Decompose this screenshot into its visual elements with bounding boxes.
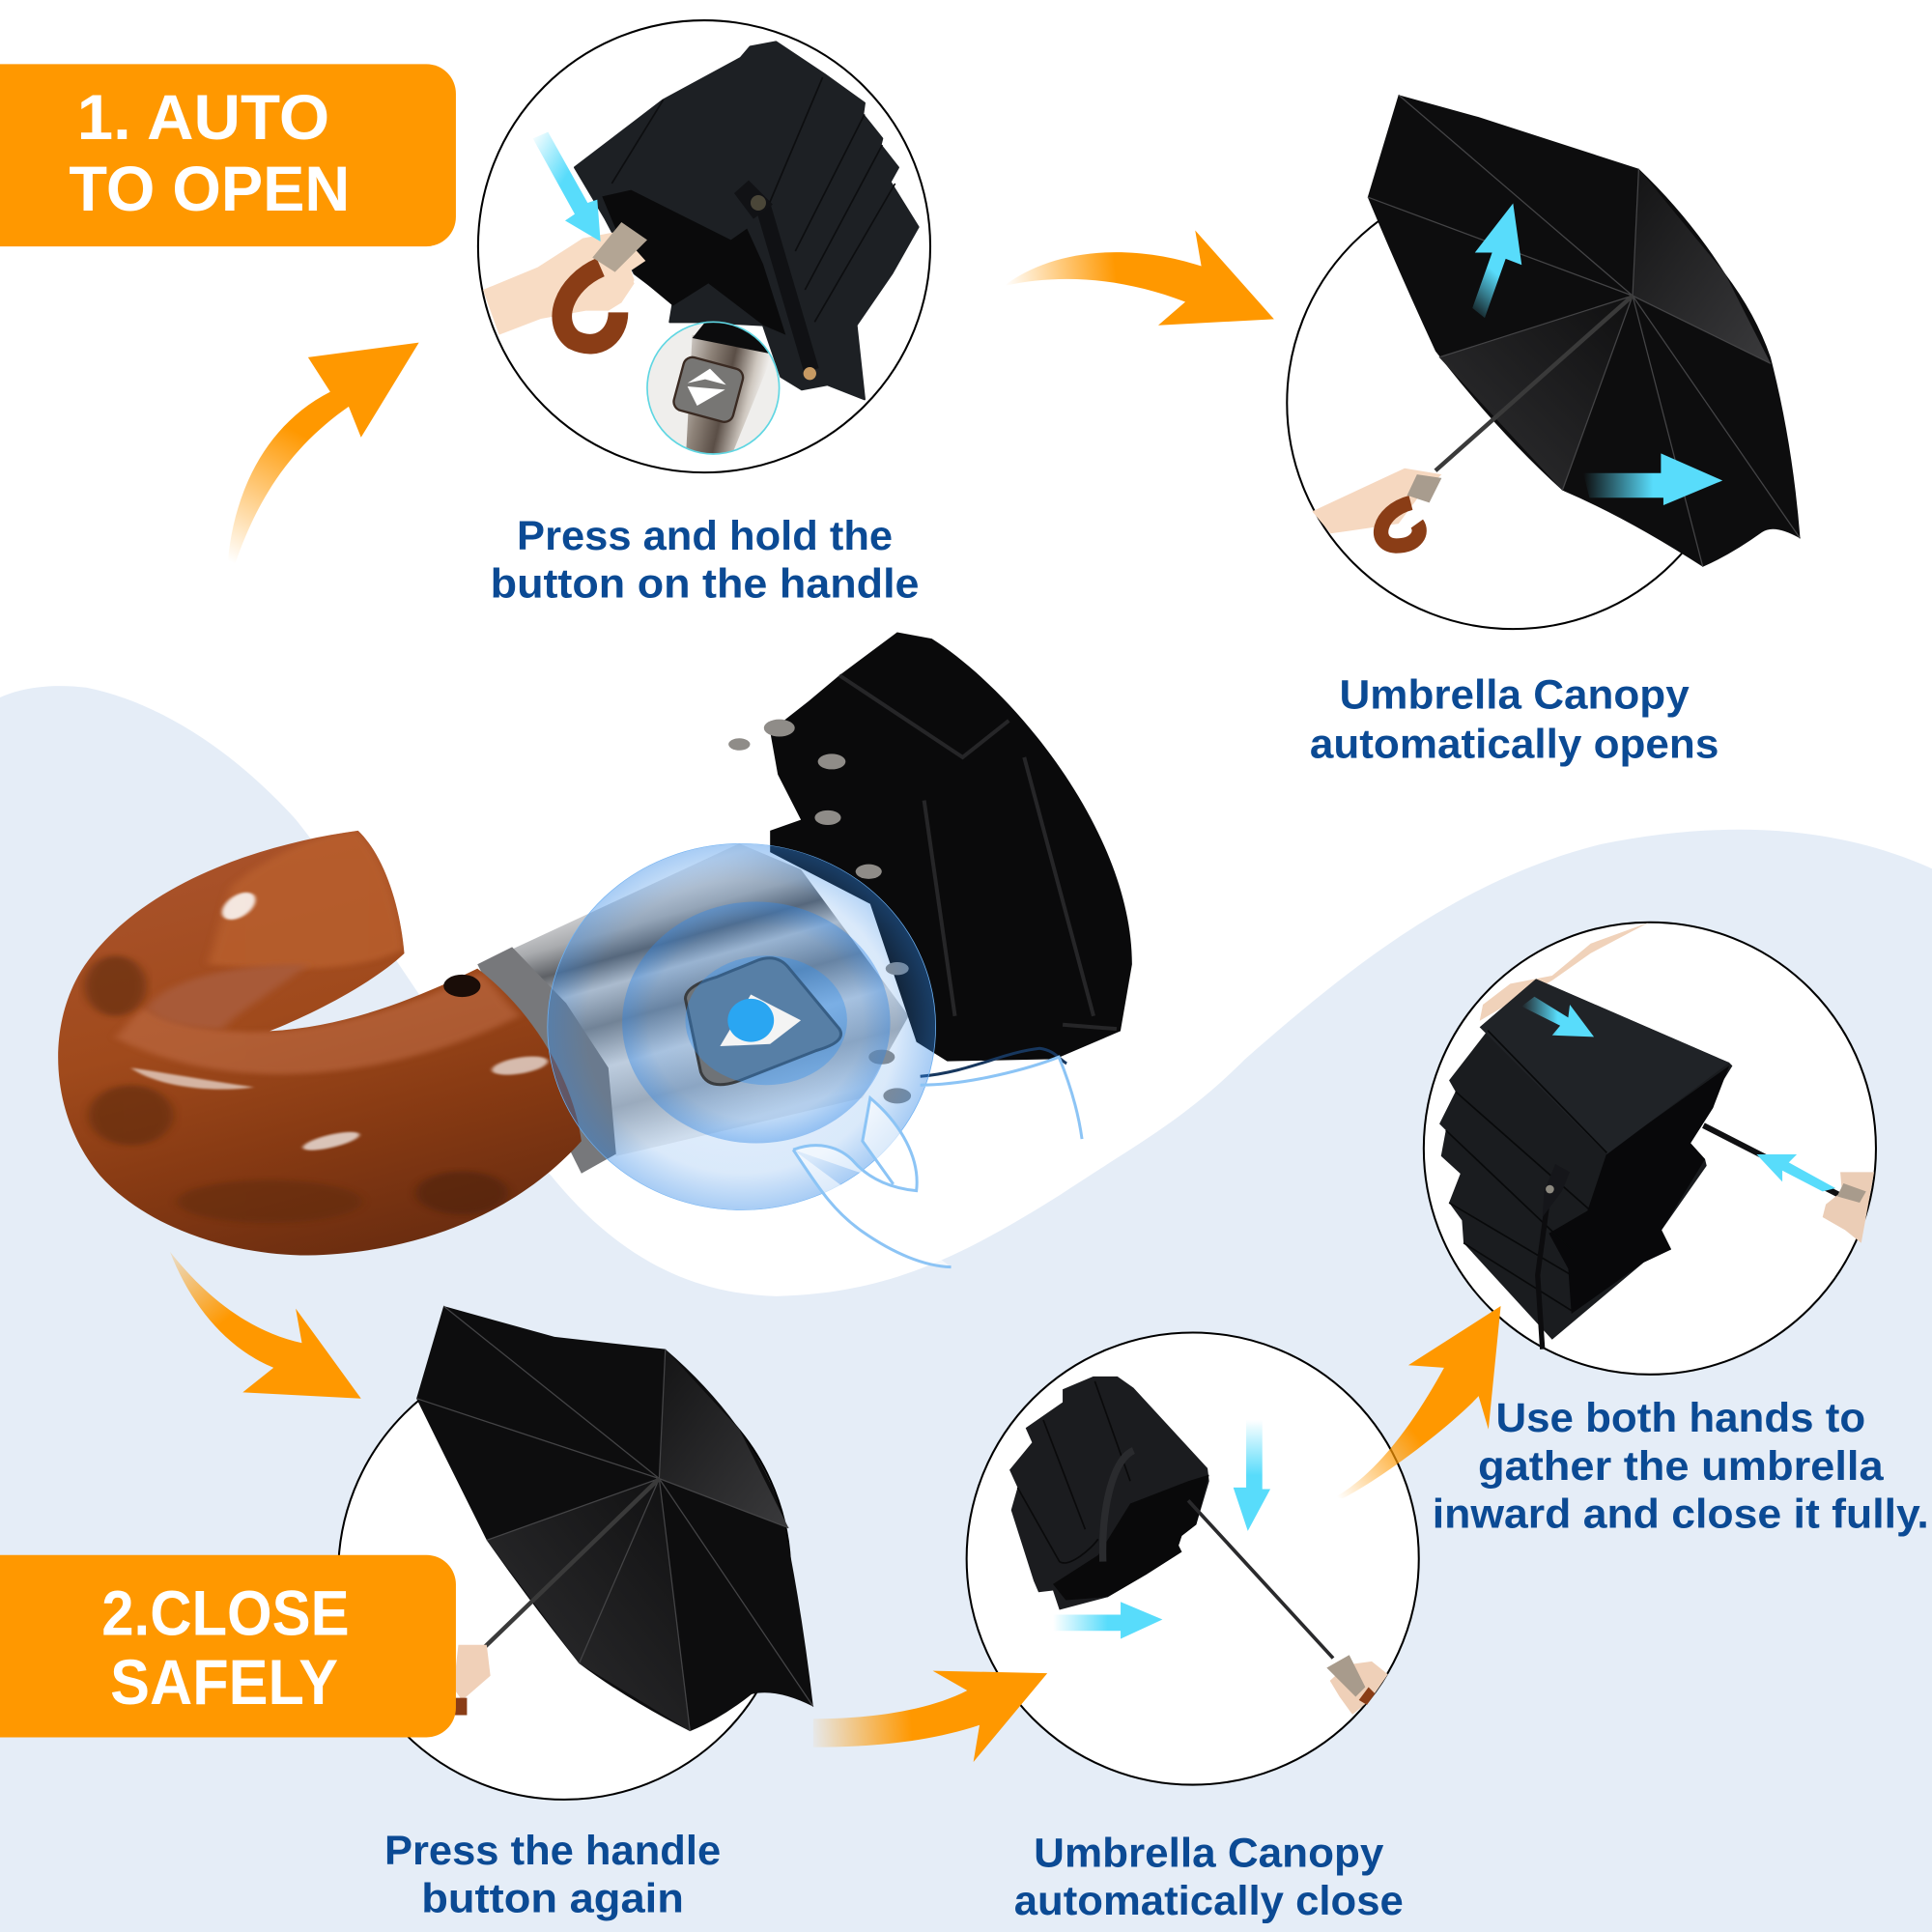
panel: canopy opens — [1287, 95, 1801, 629]
photo: half closed umbrella — [1009, 1377, 1388, 1715]
caption: canopy closes — [1014, 1830, 1404, 1924]
caption: gather umbrella: inward and close it fully. — [1433, 1492, 1929, 1538]
caption: press and hold: Press and hold the — [517, 513, 893, 559]
arrow: to canopy open — [1005, 231, 1274, 326]
panel: gather umbrella — [1424, 923, 1876, 1375]
photo: open umbrella — [416, 1306, 813, 1731]
caption: press and hold: button on the handle — [491, 561, 920, 608]
photo: hands closing umbrella — [1439, 923, 1874, 1350]
label: 1. auto to open: TO OPEN — [69, 154, 350, 225]
metal barrel — [512, 843, 909, 1156]
caption: gather umbrella: Use both hands to — [1495, 1395, 1865, 1441]
arrow: to gather umbrella — [1333, 1306, 1501, 1498]
caption: press handle again: Press the handle — [384, 1828, 721, 1874]
hand outline — [793, 1057, 1082, 1267]
arrow: to step two — [170, 1252, 361, 1399]
panel: press handle again — [338, 1306, 813, 1800]
caption: canopy closes: Umbrella Canopy — [1034, 1830, 1384, 1876]
caption: press handle again: button again — [421, 1876, 684, 1922]
caption: canopy opens: automatically opens — [1310, 721, 1719, 767]
caption: press and hold — [491, 513, 920, 608]
caption: canopy closes: automatically close — [1014, 1878, 1404, 1924]
sound-wave button rings — [548, 843, 936, 1210]
photo: hand pressing button — [483, 42, 919, 457]
panel: canopy closes — [967, 1332, 1419, 1785]
caption: canopy opens — [1310, 671, 1719, 767]
caption: gather umbrella: gather the umbrella — [1478, 1443, 1885, 1490]
icon: wooden handle close-up — [58, 632, 1132, 1267]
caption: canopy opens: Umbrella Canopy — [1339, 671, 1690, 718]
arrow: bottom to canopy close — [813, 1671, 1047, 1762]
canopy folded — [728, 632, 1132, 1103]
photo: open umbrella — [1312, 95, 1801, 567]
panel: press and hold — [478, 20, 930, 472]
wood handle — [58, 831, 582, 1256]
label: 1. auto to open — [0, 64, 456, 246]
background wave — [0, 686, 1932, 1932]
label: 2. close safely: SAFELY — [110, 1647, 338, 1719]
arrow: to step one — [228, 343, 419, 567]
label: 2. close safely — [0, 1555, 456, 1737]
caption: press handle again — [384, 1828, 721, 1922]
label: 1. auto to open: 1. AUTO — [77, 82, 329, 154]
caption: gather umbrella — [1433, 1395, 1929, 1538]
label: 2. close safely: 2.CLOSE — [101, 1578, 350, 1650]
